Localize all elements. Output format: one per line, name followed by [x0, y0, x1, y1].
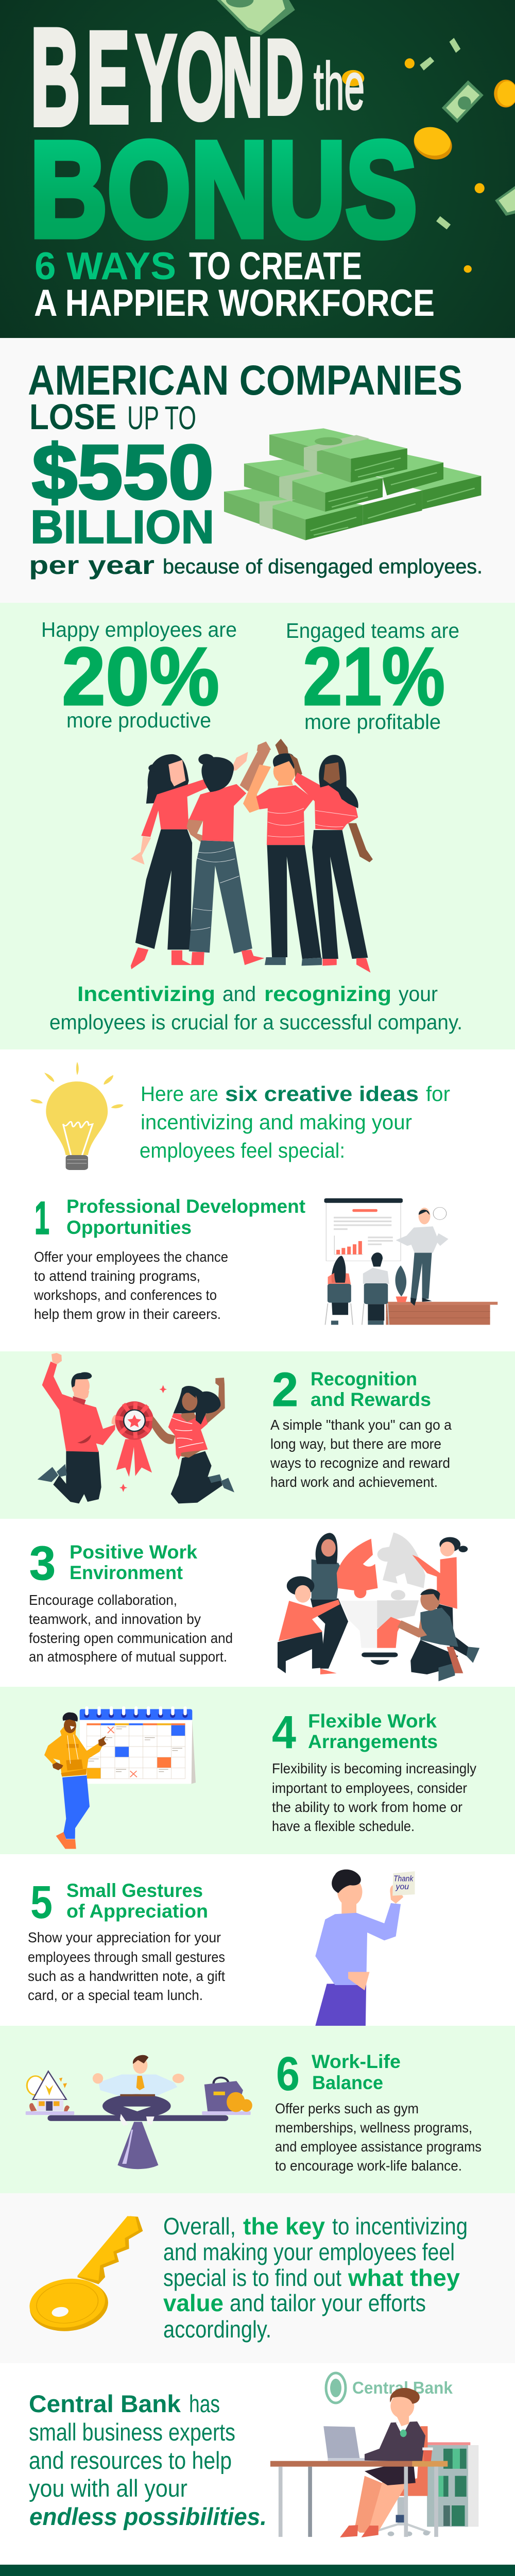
illustration: stacks of cash	[224, 428, 481, 540]
subtitle line one: 6 WAYS	[35, 244, 176, 287]
right woman	[435, 1603, 471, 1656]
man	[52, 1353, 62, 1364]
text: per year because of disengaged employees: because of disengaged employees.	[163, 555, 483, 578]
text: overall the key: Overall,	[163, 2213, 236, 2240]
idea 3: body text: an atmosphere of mutual support.	[29, 1649, 227, 1665]
text: overall the key: to incentivizing	[332, 2213, 468, 2240]
title: BEYOND: O	[177, 8, 224, 145]
woman	[152, 1416, 176, 1444]
idea 3: heading	[29, 1536, 197, 1590]
standing woman	[311, 1599, 348, 1669]
jacket and head	[365, 2421, 425, 2461]
stat: happy employees 20%: Happy employees are	[41, 618, 237, 641]
icon: light bulb	[30, 1062, 124, 1170]
panel background	[0, 1049, 515, 1351]
idea 3: body text: Encourage collaboration,	[29, 1592, 177, 1608]
text: overall the key: and tailor your efforts	[230, 2290, 426, 2316]
text: incentivizing and recognizing your: Incentivizing	[77, 982, 215, 1006]
idea 3: body text	[29, 1592, 233, 1665]
header background	[0, 0, 515, 338]
briefcase and coins	[214, 2078, 228, 2083]
title: the: the	[314, 48, 365, 124]
idea 6: heading: Balance	[312, 2072, 383, 2093]
idea 3: heading: Environment	[70, 1562, 183, 1583]
bookshelf	[427, 2445, 478, 2527]
heading: lose up to: LOSE	[29, 397, 116, 437]
text: six creative ideas intro	[140, 1082, 450, 1162]
panel: idea 5 small gestures	[0, 1854, 515, 2026]
idea 4: heading: Arrangements	[308, 1731, 438, 1752]
panel background	[0, 2193, 515, 2363]
text: overall the key: and making your employees feel	[163, 2239, 455, 2265]
idea 1: body text: Offer your employees the chance	[34, 1249, 228, 1265]
faded Central Bank logo: Central Bank	[352, 2378, 453, 2397]
panel: hero header	[0, 0, 515, 338]
panel: cost of disengagement	[0, 338, 515, 603]
idea 4: heading: Flexible Work	[308, 1710, 437, 1732]
text: Central Bank has small business experts	[29, 2390, 267, 2530]
text: six creative ideas intro: for	[426, 1082, 450, 1106]
illustration: banker at desk	[270, 2388, 478, 2537]
person: right woman	[312, 830, 368, 959]
person: second woman from behind	[240, 751, 270, 792]
title: BEYOND: N	[222, 15, 263, 140]
idea 6: heading	[276, 2047, 401, 2100]
text: Central Bank has small business experts: and resources to help	[29, 2447, 232, 2474]
right man	[420, 1608, 458, 1647]
panel: idea 6 work-life balance	[0, 2026, 515, 2193]
stat: happy employees 20%	[41, 618, 237, 732]
text: overall the key: the key	[243, 2213, 325, 2240]
title: BEYOND: D	[266, 19, 303, 136]
meditating man	[98, 2075, 177, 2096]
panel: the key takeaway	[0, 2193, 515, 2363]
idea 4: heading	[272, 1707, 438, 1758]
hoodie	[44, 1726, 102, 1776]
text: six creative ideas intro: incentivizing and making your	[141, 1110, 412, 1134]
text: Central Bank has small business experts: you with all your	[29, 2475, 187, 2502]
text: overall the key: what they	[348, 2264, 460, 2291]
text: Central Bank has small business experts: small business experts	[29, 2418, 235, 2446]
idea 5: heading: 5	[30, 1877, 53, 1928]
idea 3: heading: 3	[29, 1536, 56, 1590]
shoes	[56, 1832, 76, 1849]
idea 6: heading: Work-Life	[312, 2051, 401, 2072]
idea 2: body text: hard work and achievement.	[270, 1474, 438, 1490]
house and clock	[27, 2076, 44, 2095]
raised hands behind	[230, 752, 248, 771]
idea 5: heading	[30, 1877, 208, 1928]
text: overall the key: value	[163, 2290, 224, 2316]
text: incentivizing and recognizing your: and	[222, 982, 256, 1006]
idea 4: body text: Flexibility is becoming increasingly	[272, 1760, 476, 1776]
idea 5: body text: Show your appreciation for your	[28, 1929, 221, 1945]
illustration: team high five	[131, 739, 373, 973]
text: incentivizing and recognizing your: recognizing	[264, 982, 391, 1006]
stat: engaged teams 21%: Engaged teams are	[286, 619, 459, 642]
text: incentivizing and recognizing your: your	[399, 982, 438, 1006]
flying money and coins	[217, 0, 515, 273]
idea 6: body text: to encourage work-life balance.	[275, 2158, 462, 2174]
curly-haired man	[278, 1631, 325, 1673]
illustration: man holding thank-you card	[315, 1870, 415, 2026]
idea 5: heading: of Appreciation	[66, 1901, 208, 1922]
idea 2: heading: 2	[272, 1363, 298, 1416]
coffee cup	[423, 2449, 432, 2461]
text: incentivizing and recognizing your	[77, 982, 438, 1006]
subtitle line one	[35, 244, 362, 287]
subtitle line two: A HAPPIER WORKFORCE	[34, 282, 435, 324]
idea 6: heading: 6	[276, 2047, 300, 2100]
idea 6: body text	[275, 2100, 482, 2174]
title: BEYOND: E	[87, 6, 130, 150]
faded Central Bank logo	[326, 2373, 453, 2403]
text: per year because of disengaged employees	[29, 551, 483, 580]
illustration: man balancing home and work	[26, 2055, 252, 2169]
idea 1: heading: Professional Development	[66, 1196, 305, 1217]
illustration: presenter at whiteboard	[324, 1198, 497, 1325]
person: man	[243, 765, 271, 813]
stat: engaged teams 21%: 21%	[303, 630, 445, 722]
text: six creative ideas intro: employees feel special:	[140, 1139, 345, 1162]
laptop	[323, 2426, 359, 2458]
idea 1: heading: 1	[35, 1193, 49, 1244]
big number: $550: $550	[32, 429, 214, 515]
idea 2: heading	[272, 1363, 431, 1416]
stat: happy employees 20%: more productive	[66, 708, 211, 732]
text: Central Bank has small business experts: endless possibilities.	[29, 2503, 267, 2530]
idea 2: body text: A simple "thank you" can go a	[270, 1417, 452, 1433]
text: Central Bank has small business experts: has	[189, 2390, 220, 2417]
text: overall the key	[163, 2213, 468, 2343]
title: BONUS: BONUS	[30, 114, 417, 265]
idea 5: body text	[28, 1929, 225, 2003]
illustration: man holding thank-you card: you	[396, 1882, 409, 1891]
jeans	[62, 1775, 90, 1839]
shirt stripes	[191, 808, 356, 930]
idea 5: body text: such as a handwritten note, a gift	[28, 1968, 225, 1984]
idea 1: body text: workshops, and conferences to	[33, 1287, 217, 1303]
panel: footer	[0, 2565, 515, 2576]
idea 6: body text: and employee assistance programs	[275, 2139, 482, 2155]
text: overall the key: special is to find out	[163, 2264, 341, 2291]
idea 1: heading: Opportunities	[66, 1217, 192, 1238]
idea 4: body text	[272, 1760, 476, 1834]
heading: lose up to	[29, 397, 196, 437]
big word: BILLION: BILLION	[30, 501, 214, 553]
text: six creative ideas intro: Here are	[141, 1082, 218, 1106]
idea 1: heading	[35, 1193, 305, 1244]
panel background	[0, 603, 515, 1049]
idea 3: body text: teamwork, and innovation by	[29, 1611, 201, 1627]
panel: Central Bank experts	[0, 2363, 515, 2565]
chair	[384, 2426, 427, 2496]
panel: intro and idea 1	[0, 1049, 515, 1351]
panel background	[0, 1351, 515, 1519]
text: employees is crucial: employees is crucial for a successful company.	[49, 1010, 462, 1034]
heading: lose up to: UP TO	[127, 399, 196, 436]
idea 5: heading: Small Gestures	[66, 1880, 203, 1901]
red puzzle piece	[337, 1539, 377, 1598]
idea 4: body text: important to employees, consider	[272, 1780, 467, 1796]
idea 1: body text	[33, 1249, 228, 1322]
idea 3: heading: Positive Work	[70, 1541, 197, 1563]
idea 4: body text: have a flexible schedule.	[272, 1818, 415, 1834]
illustration: jumping colleagues with rosette	[38, 1353, 234, 1503]
rosette	[116, 1439, 152, 1477]
panel background	[0, 1854, 515, 2026]
panel background	[0, 1687, 515, 1854]
idea 1: body text: help them grow in their careers.	[34, 1306, 221, 1322]
panel: happy employees stats	[0, 603, 515, 1049]
idea 2: heading: and Rewards	[311, 1389, 431, 1410]
illustration: man holding thank-you card: Thank	[393, 1874, 414, 1883]
panel background	[0, 338, 515, 603]
idea 2: body text: ways to recognize and reward	[270, 1455, 450, 1471]
title: BEYOND: Y	[136, 11, 176, 146]
idea 1: body text: to attend training programs,	[34, 1268, 200, 1284]
panel background	[0, 2026, 515, 2193]
text: overall the key: accordingly.	[163, 2316, 271, 2343]
panel: idea 4 flexible work	[0, 1687, 515, 1854]
panel background	[0, 2363, 515, 2565]
person: left woman	[146, 754, 189, 804]
stat: engaged teams 21%	[286, 619, 459, 734]
panel: idea 2 recognition and rewards	[0, 1351, 515, 1519]
stat: happy employees 20%: 20%	[62, 630, 219, 722]
idea 6: body text: Offer perks such as gym	[275, 2100, 419, 2116]
idea 2: body text	[270, 1417, 452, 1490]
desk	[270, 2461, 412, 2467]
legs and skirt	[355, 2476, 388, 2533]
idea 5: body text: employees through small gestures	[28, 1949, 225, 1965]
icon: golden key	[18, 2216, 143, 2340]
panel background	[0, 1519, 515, 1687]
idea 6: body text: memberships, wellness programs,	[275, 2120, 472, 2136]
illustration: team assembling puzzle bulb	[278, 1533, 479, 1681]
idea 2: heading: Recognition	[311, 1368, 417, 1389]
title: BEYOND: B	[30, 0, 80, 154]
subtitle line one: TO CREATE	[189, 244, 362, 287]
illustration: man pointing at calendar	[44, 1706, 196, 1849]
idea 2: body text: long way, but there are more	[270, 1436, 441, 1452]
idea 3: body text: fostering open communication and	[29, 1630, 233, 1646]
footer background	[0, 2565, 515, 2576]
idea 5: body text: card, or a special team lunch.	[28, 1987, 203, 2003]
idea 4: heading: 4	[272, 1707, 296, 1758]
text: per year because of disengaged employees: per year	[29, 551, 154, 580]
text: Central Bank has small business experts: Central Bank	[29, 2390, 181, 2417]
stat: engaged teams 21%: more profitable	[304, 710, 441, 734]
idea 4: body text: the ability to work from home or	[272, 1799, 462, 1815]
heading: American companies: AMERICAN COMPANIES	[28, 357, 462, 404]
text: six creative ideas intro: six creative ideas	[225, 1082, 419, 1106]
panel: idea 3 positive work environment	[0, 1519, 515, 1687]
